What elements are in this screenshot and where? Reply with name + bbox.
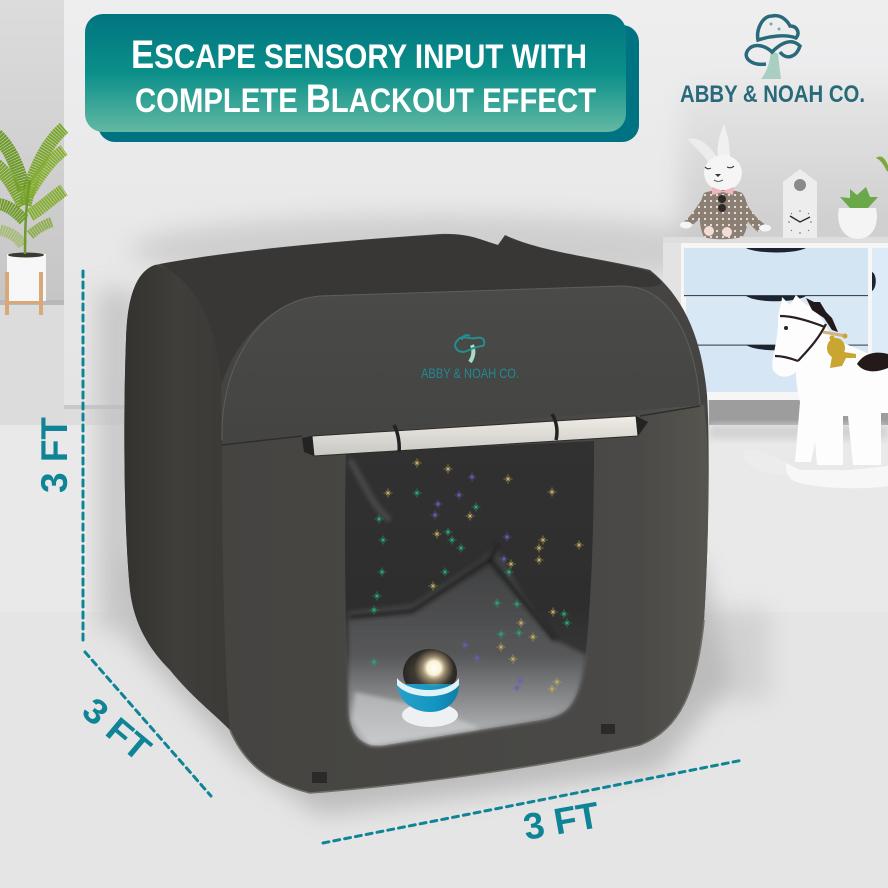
headline banner: COMPLETE BLACKOUT EFFECT bbox=[135, 77, 596, 121]
headline banner bbox=[85, 14, 639, 142]
plush rabbit bbox=[680, 124, 771, 239]
potted succulent bbox=[838, 157, 888, 239]
dimension: depth bbox=[75, 652, 211, 796]
rolled door flap with straps bbox=[302, 414, 648, 456]
tent lower front bbox=[222, 405, 708, 793]
dimension: width bbox=[323, 760, 743, 848]
dimension: depth: 3 FT bbox=[75, 690, 158, 769]
purple stars bbox=[430, 472, 524, 692]
dresser bbox=[663, 237, 888, 439]
rocking horse toy bbox=[742, 295, 888, 488]
tent outer body bbox=[124, 234, 709, 793]
green stars bbox=[370, 488, 572, 666]
tent front flap bbox=[222, 286, 700, 440]
dimension: height: 3 FT bbox=[34, 417, 75, 493]
star projector lamp bbox=[397, 648, 459, 727]
clock bbox=[783, 169, 817, 238]
tent side panel bbox=[124, 265, 230, 730]
tent logo bbox=[421, 335, 519, 381]
door opening with projected stars bbox=[345, 441, 594, 745]
corner tabs bbox=[312, 724, 615, 783]
tent top panel bbox=[160, 235, 661, 384]
tent logo: ABBY & NOAH CO. bbox=[421, 365, 519, 381]
blackout tent bbox=[124, 234, 709, 793]
headline banner: ESCAPE SENSORY INPUT WITH bbox=[131, 33, 587, 77]
yellow stars bbox=[384, 458, 584, 694]
plant in wooden stand bbox=[0, 128, 64, 315]
brand logo bbox=[680, 16, 865, 108]
dimension: width: 3 FT bbox=[520, 794, 603, 848]
